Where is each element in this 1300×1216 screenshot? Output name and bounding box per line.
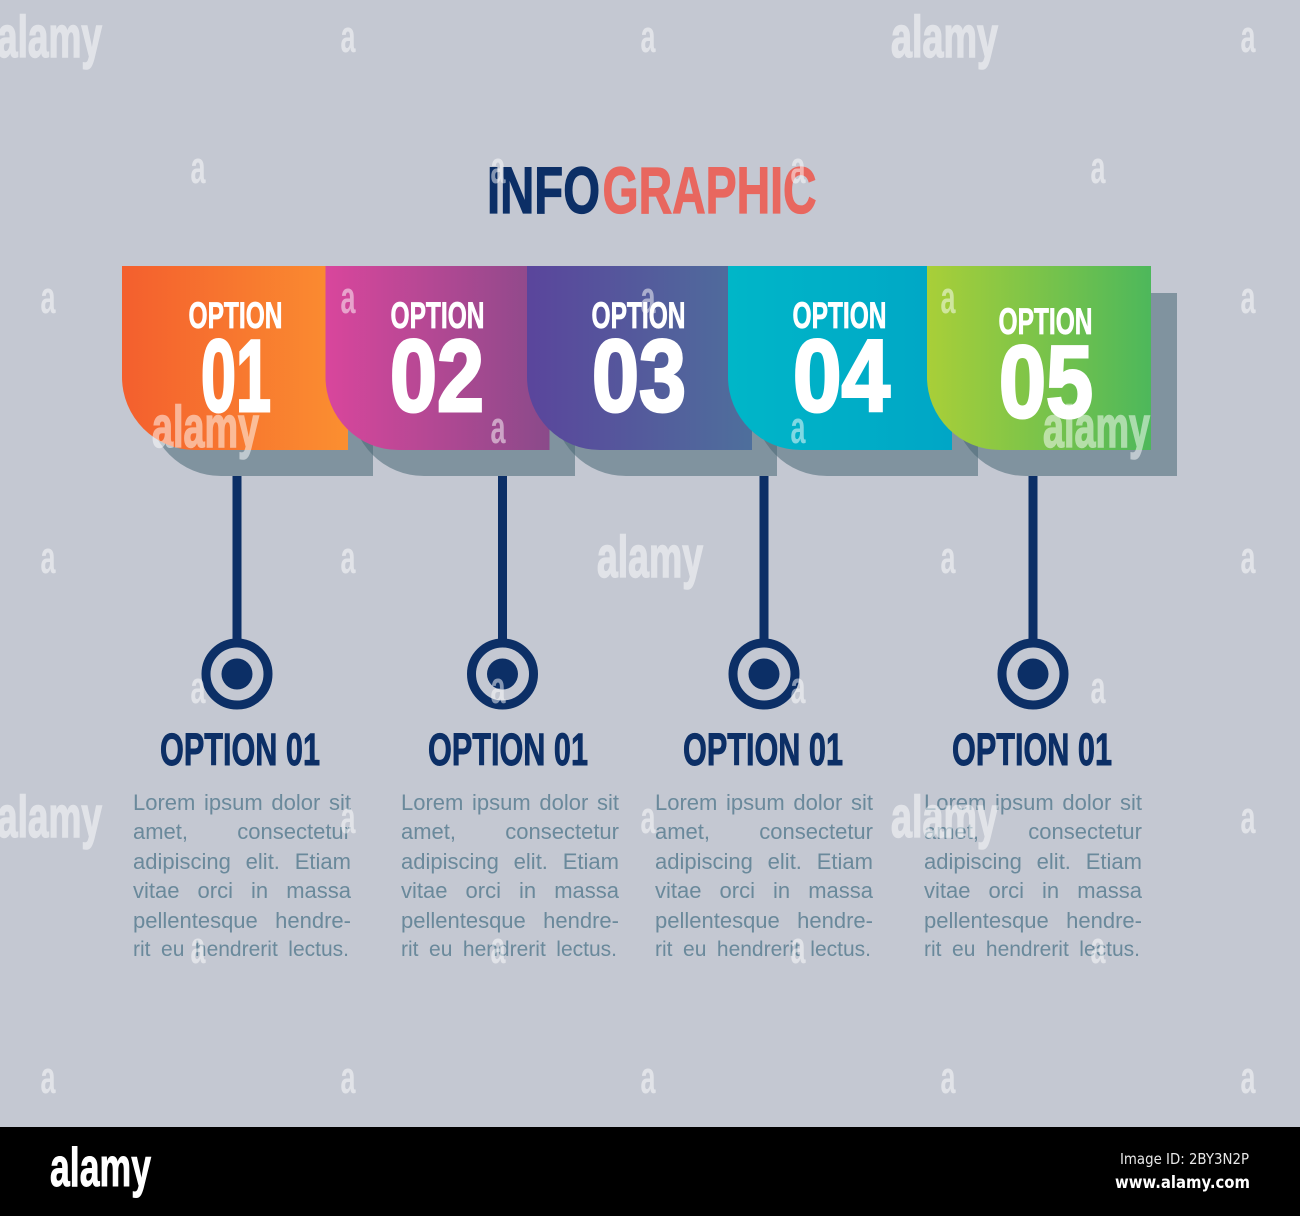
body text 2: adipiscing elit. Etiam [401, 849, 619, 874]
watermark: small a marks: a [1090, 922, 1106, 973]
body text 1: amet, consectetur [133, 819, 351, 844]
watermark: small a marks: a [40, 272, 56, 323]
watermark: small a marks: a [340, 792, 356, 843]
body text 1: Lorem ipsum dolor sit [133, 790, 351, 815]
connector 4 [1002, 476, 1064, 705]
watermark: small a marks: a [640, 272, 656, 323]
body text 1: pellentesque hendre- [133, 908, 351, 933]
body text 3: amet, consectetur [655, 819, 873, 844]
heading 1: OPTION 01 [160, 724, 320, 775]
body text 2: pellentesque hendre- [401, 908, 619, 933]
watermark: small a marks: a [1240, 1052, 1256, 1103]
title [487, 153, 816, 227]
body text 2 [401, 790, 619, 961]
body text 1: vitae orci in massa [133, 878, 351, 903]
watermark: small a marks: a [790, 662, 806, 713]
option 05 block: OPTION [998, 301, 1092, 342]
watermark: small a marks: a [790, 922, 806, 973]
body text 2: rit eu hendrerit lectus. [401, 938, 617, 961]
option 02 block [326, 266, 550, 450]
watermark: large alamy marks: alamy [891, 5, 998, 70]
body text 1: rit eu hendrerit lectus. [133, 938, 349, 961]
option 04 block: OPTION [792, 295, 886, 336]
connector 1 [206, 476, 268, 705]
watermark: large alamy marks [0, 5, 1150, 850]
watermark: small a marks: a [640, 1052, 656, 1103]
watermark: small a marks: a [190, 662, 206, 713]
watermark: small a marks: a [40, 532, 56, 583]
option 03 block: 03 [592, 319, 686, 433]
connector 2 [472, 476, 534, 705]
watermark: large alamy marks: alamy [0, 5, 102, 70]
watermark: small a marks: a [340, 532, 356, 583]
body text 3: rit eu hendrerit lectus. [655, 938, 871, 961]
body text 2: vitae orci in massa [401, 878, 619, 903]
watermark: small a marks: a [490, 662, 506, 713]
watermark: small a marks: a [490, 922, 506, 973]
option 02 block: OPTION [390, 295, 484, 336]
watermark: small a marks: a [1240, 792, 1256, 843]
body text 1: adipiscing elit. Etiam [133, 849, 351, 874]
watermark: small a marks: a [640, 792, 656, 843]
option 05 block: 05 [999, 325, 1093, 439]
watermark: large alamy marks: alamy [597, 525, 703, 590]
body text 2: Lorem ipsum dolor sit [401, 790, 619, 815]
watermark: small a marks: a [790, 402, 806, 453]
heading 4: OPTION 01 [952, 724, 1112, 775]
body text 3: adipiscing elit. Etiam [655, 849, 873, 874]
column headings [160, 724, 1112, 775]
footer image id: Image ID: 2BY3N2P [1120, 1150, 1249, 1168]
watermark: small a marks: a [340, 11, 356, 62]
watermark: small a marks: a [940, 272, 956, 323]
body text 3 [655, 790, 873, 961]
option 03 block: OPTION [592, 295, 686, 336]
option 04 block [728, 266, 952, 450]
body text 3: Lorem ipsum dolor sit [655, 790, 873, 815]
watermark: small a marks: a [640, 11, 656, 62]
option 01 block: OPTION [188, 295, 282, 336]
title: INFO: INFO [487, 153, 600, 227]
body text 4: Lorem ipsum dolor sit [924, 790, 1142, 815]
watermark: large alamy marks: alamy [152, 395, 259, 460]
body text 4: rit eu hendrerit lectus. [924, 938, 1140, 961]
footer logo: alamy [50, 1136, 151, 1198]
footer bar [0, 1127, 1300, 1216]
watermark: small a marks: a [490, 402, 506, 453]
watermark: small a marks: a [1090, 142, 1106, 193]
connector 3 [733, 476, 795, 705]
watermark: small a marks: a [1240, 272, 1256, 323]
option 03 block [527, 266, 752, 450]
footer url: www.alamy.com [1115, 1173, 1250, 1193]
heading 2: OPTION 01 [428, 724, 588, 775]
watermark: small a marks: a [1240, 11, 1256, 62]
option 02 block: 02 [390, 319, 484, 433]
watermark: small a marks: a [40, 1052, 56, 1103]
watermark: small a marks: a [190, 922, 206, 973]
heading 3: OPTION 01 [683, 724, 843, 775]
body text 4 [924, 790, 1142, 961]
option 05 block [927, 266, 1151, 450]
watermark: small a marks: a [340, 1052, 356, 1103]
watermark: small a marks: a [1090, 662, 1106, 713]
watermark: large alamy marks: alamy [1043, 395, 1150, 460]
body text 3: vitae orci in massa [655, 878, 873, 903]
option 01 block [122, 266, 348, 450]
title: GRAPHIC: GRAPHIC [602, 153, 816, 227]
watermark: small a marks: a [940, 1052, 956, 1103]
body text 4: pellentesque hendre- [924, 908, 1142, 933]
watermark: large alamy marks: alamy [0, 785, 102, 850]
body text 4: vitae orci in massa [924, 878, 1142, 903]
option 01 block: 01 [201, 319, 271, 433]
watermark: small a marks: a [790, 142, 806, 193]
block shadows [148, 293, 1177, 476]
watermark: small a marks: a [1240, 532, 1256, 583]
watermark: small a marks: a [940, 532, 956, 583]
option 04 block: 04 [793, 319, 890, 433]
watermark: small a marks: a [340, 272, 356, 323]
body text 3: pellentesque hendre- [655, 908, 873, 933]
body text 4: adipiscing elit. Etiam [924, 849, 1142, 874]
watermark: small a marks: a [190, 142, 206, 193]
body text 1 [133, 790, 351, 961]
body text 2: amet, consectetur [401, 819, 619, 844]
watermark: large alamy marks: alamy [891, 785, 998, 850]
body text 4: amet, consectetur [924, 819, 1142, 844]
watermark: small a marks: a [490, 142, 506, 193]
